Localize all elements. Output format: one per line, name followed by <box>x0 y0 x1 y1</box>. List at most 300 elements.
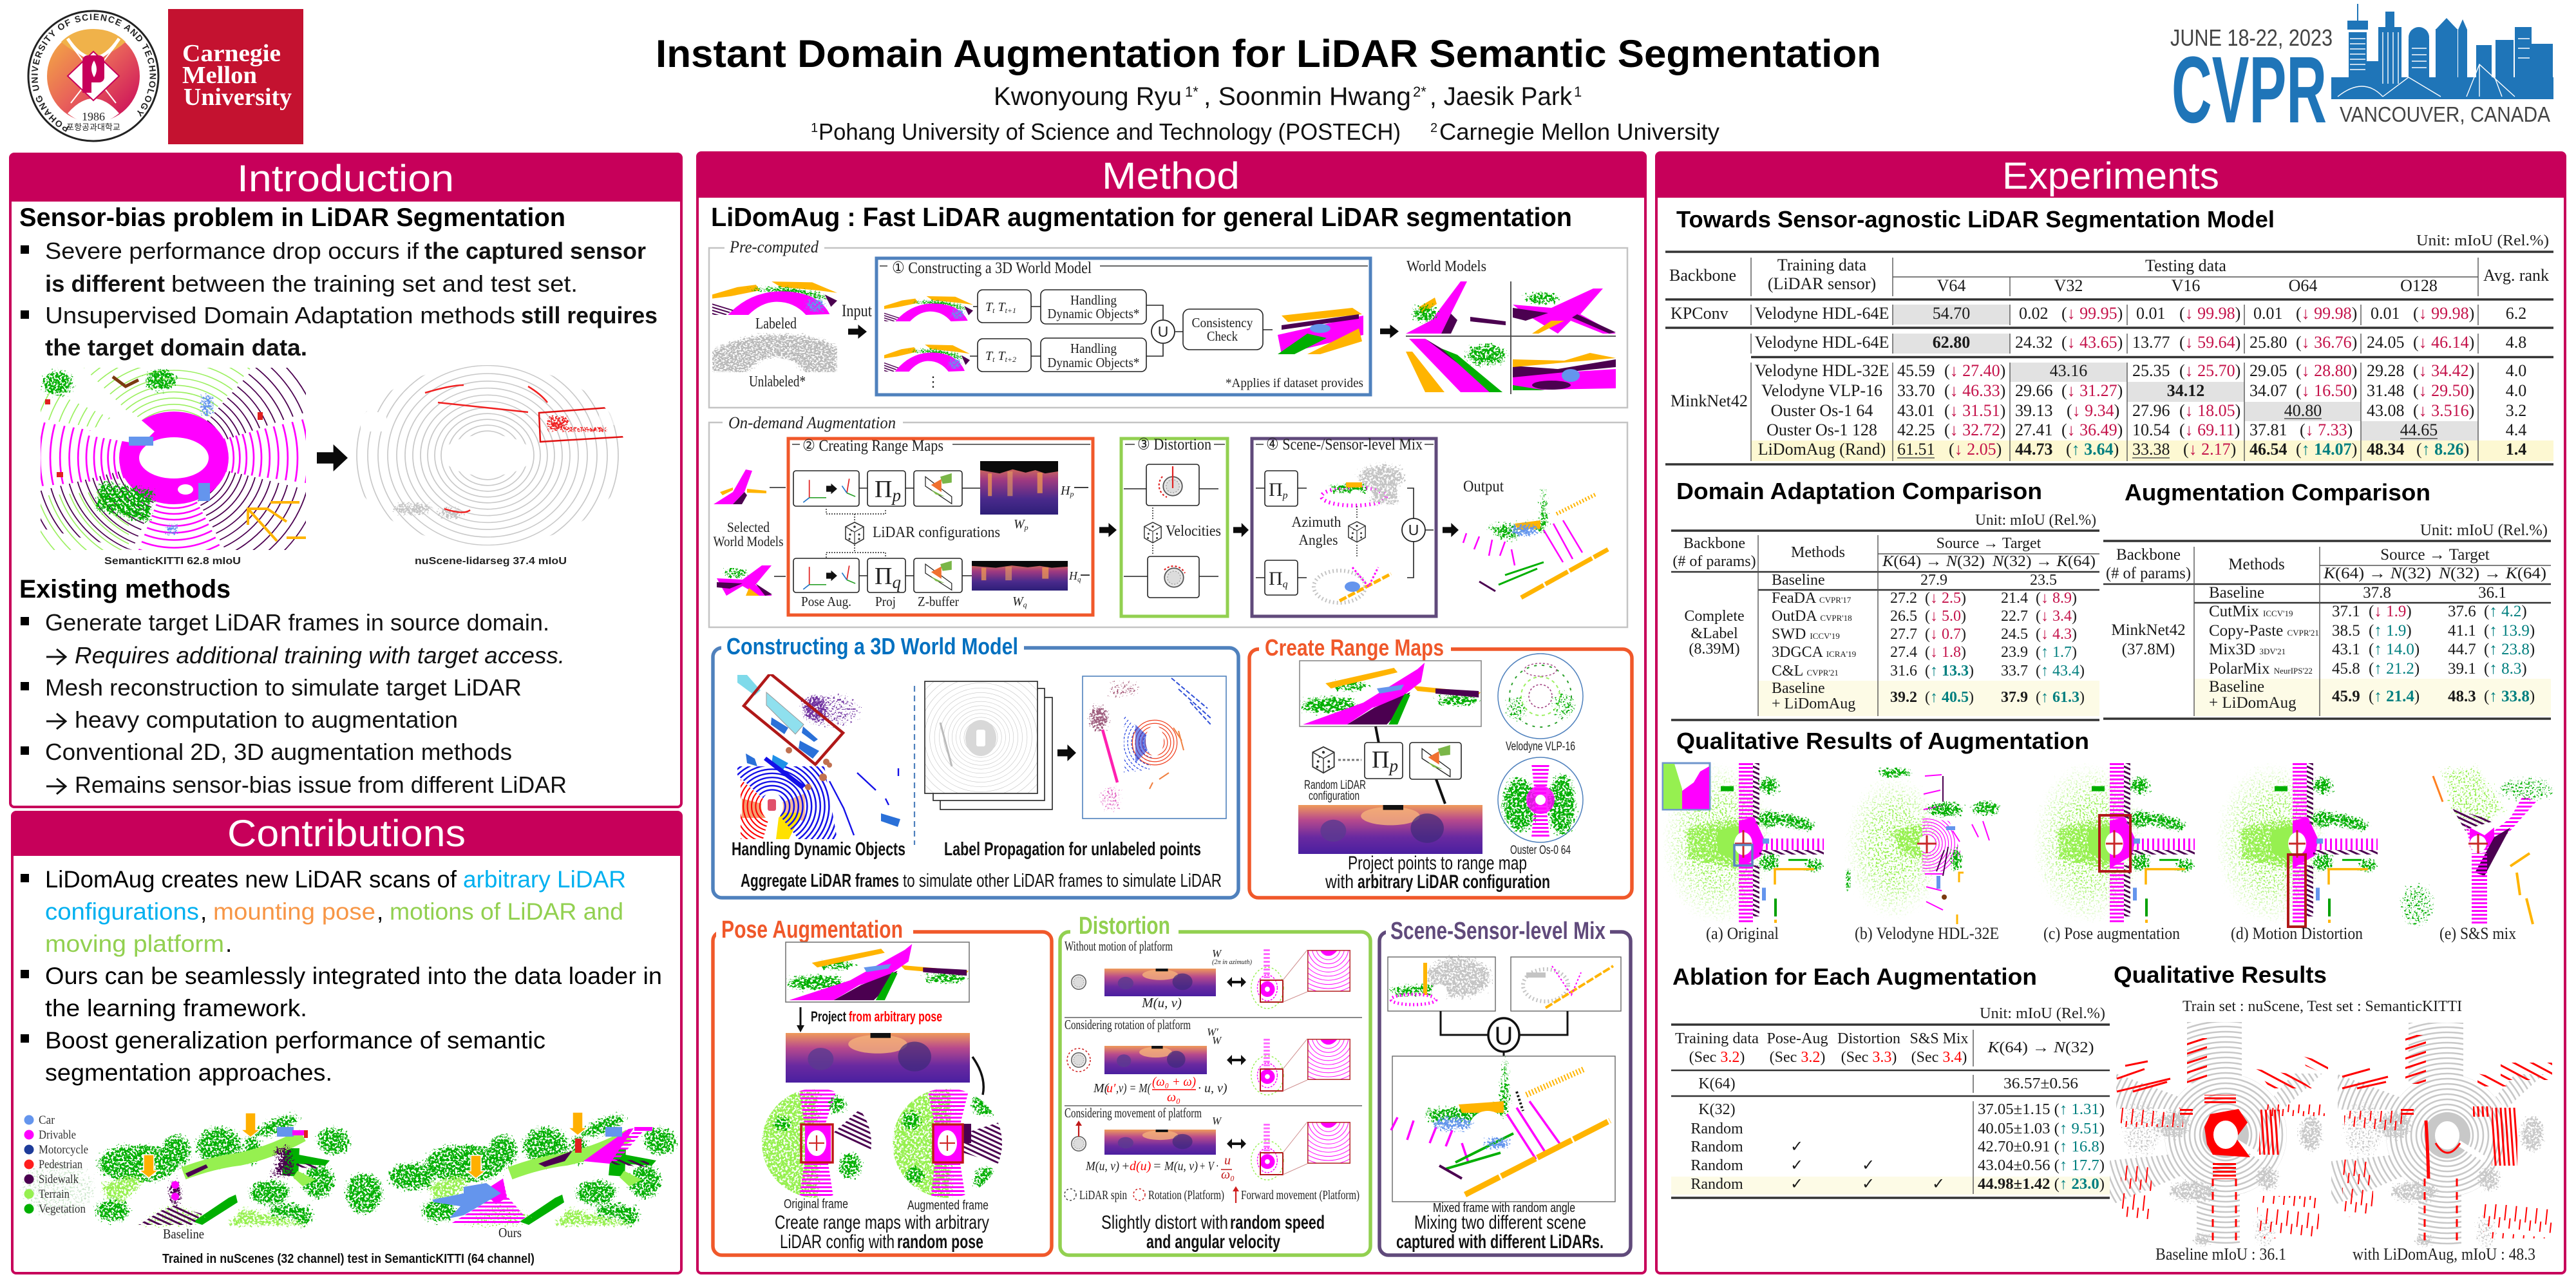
table: augmentation comparison: Backbone <box>2116 546 2181 564</box>
table: sensor-agnostic results: 34.12 <box>2167 381 2204 400</box>
table: domain adaptation comparison: 37.9 <box>2001 689 2028 706</box>
image: S&S mix: (e) S&S mix <box>2439 924 2516 943</box>
arrow: project: from arbitrary pose <box>849 1009 942 1025</box>
table: sensor-agnostic results: 46.54 <box>2249 440 2287 459</box>
table: sensor-agnostic results: (↓ 99.98) <box>2413 304 2474 323</box>
table: domain adaptation comparison: C&L CVPR'21 <box>1772 663 1839 679</box>
table: augmentation comparison: 36.1 <box>2478 584 2506 601</box>
row: movement of platform: M(u, v) <box>1164 1159 1198 1173</box>
box: distortion: ③ Distortion <box>1137 436 1211 453</box>
table: sensor-agnostic results: 42.25 <box>1897 421 1935 439</box>
legend: semantic classes: Drivable <box>39 1128 76 1142</box>
table: sensor-agnostic results: Velodyne HDL-64E <box>1755 304 1889 323</box>
box: constructing a 3D world model: Check <box>1207 328 1238 344</box>
table: ablation: K(32) <box>1698 1101 1736 1118</box>
table: sensor-agnostic results: (↓ 28.80) <box>2296 361 2357 380</box>
table: sensor-agnostic results: 27.41 <box>2015 421 2053 439</box>
table: augmentation comparison: MinkNet42 <box>2111 621 2186 639</box>
caption: aggregate frames: Aggregate LiDAR frames <box>741 871 899 891</box>
table: sensor-agnostic results: (↓ 36.49) <box>2061 421 2123 439</box>
table: sensor-agnostic results: MinkNet42 <box>1671 392 1748 410</box>
logo: POSTECH: POHANG UNIVERSITY OF SCIENCE AND TECHNOLOGY <box>31 14 156 132</box>
box: creating range maps: W <box>1012 594 1023 609</box>
scan: Velodyne VLP-16 <box>1498 654 1583 753</box>
caption: random speed: Slightly distort with <box>1101 1212 1228 1233</box>
table: domain adaptation comparison: Baseline <box>1772 680 1825 697</box>
table: domain adaptation comparison: FeaDA CVPR'17 <box>1772 590 1852 607</box>
table: sensor-agnostic results: 24.05 <box>2367 333 2405 352</box>
table: ablation: Random <box>1690 1176 1743 1193</box>
affiliations: 1 <box>811 121 818 135</box>
image: Velodyne HDL-32E <box>1846 766 2004 943</box>
bullets: existing methods: heavy computation to augmentation <box>75 706 458 733</box>
table: domain adaptation comparison: (↓ 0.7) <box>1925 626 1966 643</box>
diagram: pre-computed: Unlabeled* <box>749 374 806 390</box>
diagram: pre-computed: Input <box>842 301 873 320</box>
table: sensor-agnostic results: (↓ 69.11) <box>2179 421 2240 439</box>
scan: augmented frame: Augmented frame <box>907 1198 989 1213</box>
box: scene-sensor-level mix: Angles <box>1298 532 1338 548</box>
legend: motion types <box>1065 1186 1359 1203</box>
box: creating range maps: Π <box>875 476 892 503</box>
union connector: U <box>1495 1022 1513 1050</box>
table: augmentation comparison: K(64) → N(32) <box>2323 565 2431 582</box>
table: augmentation comparison: (↑ 23.8) <box>2484 641 2535 658</box>
bullets: contributions: configurations <box>45 898 199 925</box>
legend: semantic classes: Motorcycle <box>39 1143 88 1157</box>
subheading: augmentation comparison: Augmentation Comparison <box>2125 479 2430 506</box>
table: augmentation comparison: 37.6 <box>2448 603 2476 620</box>
image: LiDomAug error map <box>2318 1007 2576 1264</box>
affiliations: 2 <box>1430 121 1437 135</box>
table: augmentation comparison: Mix3D 3DV'21 <box>2209 641 2286 658</box>
table: ablation: (Sec 3.2) <box>1689 1049 1745 1066</box>
row: movement of platform: u <box>1224 1153 1231 1168</box>
box: creating range maps: Z-buffer <box>918 594 959 609</box>
table: sensor-agnostic results: 13.77 <box>2132 333 2170 352</box>
table: sensor-agnostic results: V32 <box>2054 276 2083 295</box>
heading: Experiments: Experiments <box>2002 155 2219 197</box>
panel: Experiments <box>1655 151 2576 1273</box>
logo: Carnegie Mellon University <box>168 9 303 144</box>
bullets: sensor bias: Unsupervised Domain Adaptation methods <box>45 302 515 328</box>
table: domain adaptation comparison: (↑ 43.4) <box>2036 663 2085 679</box>
bullets: sensor bias: is different <box>45 270 165 297</box>
box: constructing a 3D world model: t <box>992 355 995 364</box>
caption: random speed: random speed <box>1230 1212 1325 1233</box>
box: constructing a 3D world model: Handling <box>1070 292 1117 308</box>
row: movement of platform <box>1065 1016 1430 1222</box>
icon: lidar configuration: Random LiDAR <box>1304 779 1366 792</box>
table: sensor-agnostic results: (↓ 7.33) <box>2300 421 2353 439</box>
box: constructing a 3D world model: ⋮ <box>926 374 940 390</box>
table: ablation: K(64) → N(32) <box>1987 1039 2094 1056</box>
bullets: contributions: motions of LiDAR and <box>390 898 623 925</box>
table: augmentation comparison: CutMix ICCV'19 <box>2209 603 2293 620</box>
affiliations: Carnegie Mellon University <box>1439 118 1719 145</box>
panel: Introduction <box>0 153 700 807</box>
stacked label frames <box>913 681 1053 845</box>
box: creating range maps: Π <box>875 563 892 590</box>
subheading: ablation: Ablation for Each Augmentation <box>1672 963 2037 990</box>
table: domain adaptation comparison: SWD ICCV'19 <box>1772 626 1840 643</box>
table: ablation: 43.04±0.56 (↑ 17.7) <box>1978 1157 2105 1174</box>
panel: scene-sensor-level mix: Scene-Sensor-level Mix <box>1390 918 1605 945</box>
image: pose augmentation: (c) Pose augmentation <box>2043 924 2180 943</box>
panel: distortion: Distortion <box>1079 913 1170 940</box>
caption: random speed <box>1101 1212 1325 1253</box>
table: domain adaptation comparison: Unit: mIoU (Rel.%) <box>1975 512 2096 529</box>
box: constructing a 3D world model: T <box>994 300 1006 314</box>
row: without motion: W <box>1212 947 1222 960</box>
table: sensor-agnostic results: V16 <box>2172 276 2200 295</box>
box: constructing a 3D world model: Dynamic Objects* <box>1047 306 1140 321</box>
table: augmentation comparison: 39.1 <box>2448 660 2476 677</box>
panel: scene-sensor-level mix <box>1379 918 1631 1255</box>
image: pose augmentation <box>2034 763 2195 943</box>
table: ablation: ✓ <box>1790 1139 1803 1155</box>
table: sensor-agnostic results: (↓ 43.65) <box>2061 333 2123 352</box>
authors: 2* <box>1413 84 1426 100</box>
box: creating range maps: Pose Aug. <box>801 594 851 609</box>
table: sensor-agnostic results: 48.34 <box>2367 440 2405 459</box>
table: augmentation comparison: (↑ 21.2) <box>2369 660 2420 677</box>
panel: constructing a 3D world model: Constructing a 3D World Model <box>726 633 1018 659</box>
logo: CVPR 2023 Vancouver <box>2170 4 2553 143</box>
output: Output <box>1463 478 1504 495</box>
image: original: (a) Original <box>1706 924 1779 943</box>
table: sensor-agnostic results: 27.96 <box>2132 401 2170 420</box>
table: sensor-agnostic results: (↓ 18.05) <box>2179 401 2240 420</box>
box: scene-sensor-level mix <box>1252 436 1436 616</box>
box: creating range maps: LiDAR configurations <box>873 524 1000 541</box>
table: domain adaptation comparison: Baseline <box>1772 572 1825 589</box>
table: sensor-agnostic results: Avg. rank <box>2483 266 2549 285</box>
table: sensor-agnostic results: 31.48 <box>2367 381 2405 400</box>
table: ablation: Random <box>1690 1139 1743 1155</box>
scan: augmented frame <box>893 1088 1005 1213</box>
title: Instant Domain Augmentation for LiDAR Semantic Segmentation <box>656 32 1881 75</box>
box: constructing a 3D world model: t+1 <box>1005 306 1016 315</box>
bullets: sensor bias <box>21 238 658 361</box>
bullets: existing methods <box>21 609 567 798</box>
heading: Method: Method <box>1102 155 1240 197</box>
heading: Introduction: Introduction <box>237 158 454 200</box>
table: sensor-agnostic results: (↓ 36.76) <box>2296 333 2357 352</box>
bullets: contributions: . <box>225 931 232 957</box>
table: sensor-agnostic results <box>1665 252 2553 464</box>
row: without motion: (2π in azimuth) <box>1212 958 1252 966</box>
table: sensor-agnostic results: (↑ 14.07) <box>2296 440 2357 459</box>
table: sensor-agnostic results: KPConv <box>1671 304 1728 323</box>
box: constructing a 3D world model: T <box>994 349 1006 363</box>
table: sensor-agnostic results: (↓ 31.51) <box>1944 401 2005 420</box>
table: domain adaptation comparison: (# of params) <box>1672 553 1756 570</box>
caption: random pose: random pose <box>897 1231 983 1253</box>
captions: baseline and ours <box>163 1225 522 1242</box>
box: creating range maps: q <box>1023 600 1027 609</box>
table: domain adaptation comparison: N(32) → K(64) <box>1992 553 2096 570</box>
table: ablation: (Sec 3.3) <box>1841 1049 1897 1066</box>
box: creating range maps: p <box>1024 523 1028 532</box>
box: creating range maps: H <box>1061 484 1070 498</box>
table: ablation: (Sec 3.2) <box>1770 1049 1825 1066</box>
table: sensor-agnostic results: 44.73 <box>2015 440 2053 459</box>
row: without motion: Without motion of platform <box>1065 938 1173 954</box>
box: scene-sensor-level mix: Π <box>1269 568 1283 589</box>
caption: training note: Trained in nuScenes (32 channel) test in SemanticKITTI (64 channel) <box>162 1252 535 1266</box>
note: train and test set: Train set : nuScene, Test set : SemanticKITTI <box>2183 998 2462 1015</box>
caption: random pose <box>775 1212 989 1253</box>
box: constructing a 3D world model: U <box>1158 323 1168 340</box>
table: sensor-agnostic results: (↓ 27.40) <box>1944 361 2005 380</box>
diagram: on-demand augmentation: World Models <box>714 533 783 549</box>
table: domain adaptation comparison: (↓ 5.0) <box>1925 608 1966 625</box>
table: domain adaptation comparison: Complete <box>1684 608 1745 625</box>
image: Velodyne HDL-32E: (b) Velodyne HDL-32E <box>1855 924 1999 943</box>
box: scene-sensor-level mix: q <box>1283 579 1288 590</box>
table: sensor-agnostic results: 3.2 <box>2506 401 2526 420</box>
box: scene-sensor-level mix: U <box>1408 522 1419 538</box>
table: augmentation comparison: N(32) → K(64) <box>2438 565 2546 582</box>
scan: Velodyne VLP-16: Velodyne VLP-16 <box>1506 740 1575 753</box>
table: augmentation comparison: (↑ 14.0) <box>2369 641 2420 658</box>
table: augmentation comparison: 44.7 <box>2448 641 2476 658</box>
panel: Method <box>663 151 1645 1273</box>
authors: , Soonmin Hwang <box>1204 82 1411 111</box>
table: ablation: K(64) <box>1698 1075 1736 1092</box>
table: sensor-agnostic results: Velodyne HDL-64E <box>1755 333 1889 352</box>
table: ablation <box>1671 1005 2110 1198</box>
box: constructing a 3D world model: T <box>985 300 992 314</box>
table: domain adaptation comparison: K(64) → N(32) <box>1882 553 1985 570</box>
box: creating range maps: q <box>892 573 901 592</box>
table: ablation: Training data <box>1675 1030 1759 1047</box>
table: sensor-agnostic results: (↓ 99.95) <box>2061 304 2123 323</box>
table: domain adaptation comparison: (↓ 3.4) <box>2036 608 2077 625</box>
legend: motion types: Forward movement (Platform) <box>1241 1188 1359 1202</box>
table: sensor-agnostic results: V64 <box>1937 276 1965 295</box>
table: domain adaptation comparison: (↓ 8.9) <box>2036 590 2077 607</box>
caption: mixing scenes: captured with different LiDARs. <box>1396 1231 1604 1253</box>
table: augmentation comparison: (# of params) <box>2106 565 2191 582</box>
box: creating range maps <box>788 437 1093 615</box>
caption: mixing scenes <box>1396 1212 1604 1253</box>
table: augmentation comparison: 37.8 <box>2363 584 2391 601</box>
image: nuScenes scan <box>356 365 623 545</box>
box: constructing a 3D world model: *Applies if dataset provides <box>1226 376 1363 390</box>
legend: semantic classes: Vegetation <box>39 1202 86 1216</box>
union connector <box>1441 1011 1567 1056</box>
subheading: existing methods: Existing methods <box>19 575 231 603</box>
table: sensor-agnostic results: 0.01 <box>2371 304 2400 323</box>
caption: project points: arbitrary LiDAR configuration <box>1358 871 1550 893</box>
logo: CVPR 2023 Vancouver: VANCOUVER, CANADA <box>2340 102 2550 126</box>
image: motion distortion: (d) Motion Distortion <box>2231 924 2363 943</box>
panel: pose augmentation <box>713 916 1052 1255</box>
row: rotation of platform: Considering rotation of platform <box>1065 1017 1191 1032</box>
table: augmentation comparison: (↑ 21.4) <box>2369 688 2420 705</box>
bullets: existing methods: Requires additional training with target access. <box>75 642 565 668</box>
authors <box>994 82 1582 111</box>
table: sensor-agnostic results: 4.0 <box>2506 361 2526 380</box>
table: ablation: S&S Mix <box>1910 1030 1968 1047</box>
diagram: pre-computed: Pre-computed <box>729 238 819 256</box>
subheading: qualitative results of augmentation: Qualitative Results of Augmentation <box>1676 728 2089 754</box>
box: creating range maps: p <box>1069 489 1074 498</box>
caption: project points: with <box>1325 871 1354 893</box>
table: sensor-agnostic results: (↓ 59.64) <box>2179 333 2240 352</box>
table: sensor-agnostic results: 25.80 <box>2249 333 2287 352</box>
box: creating range maps: Proj <box>875 594 896 609</box>
caption: random pose: LiDAR config with <box>780 1231 895 1253</box>
table: sensor-agnostic results: 0.02 <box>2019 304 2048 323</box>
subheading: sensor-bias problem: Sensor-bias problem in LiDAR Segmentation <box>19 204 565 232</box>
box: creating range maps: W <box>1014 517 1025 531</box>
caption: random pose: Create range maps with arbitrary <box>775 1212 989 1233</box>
table: sensor-agnostic results: Training data <box>1777 256 1867 274</box>
row: rotation of platform: W′ <box>1207 1026 1218 1038</box>
table: sensor-agnostic results: (↓ 3.516) <box>2413 401 2474 420</box>
logo: CVPR 2023 Vancouver: CVPR <box>2172 37 2327 143</box>
legend: motion types: Rotation (Platform) <box>1148 1188 1224 1202</box>
table: domain adaptation comparison: 39.2 <box>1890 689 1917 706</box>
table: domain adaptation comparison: 24.5 <box>2001 626 2028 643</box>
row: rotation of platform: ,v) = M( <box>1116 1081 1151 1095</box>
legend: semantic classes <box>23 1113 93 1216</box>
table: augmentation comparison <box>2103 522 2551 719</box>
legend: motion types: LiDAR spin <box>1079 1188 1127 1202</box>
image: original <box>1663 763 1824 943</box>
panel: constructing a 3D world model <box>711 638 1240 900</box>
bullets: contributions: moving platform <box>45 931 224 957</box>
logo: Carnegie Mellon University: University <box>184 84 292 111</box>
table: sensor-agnostic results: (↓ 31.27) <box>2061 381 2123 400</box>
table: sensor-agnostic results: 4.4 <box>2506 421 2526 439</box>
table: sensor-agnostic results: 24.32 <box>2015 333 2053 352</box>
table: augmentation comparison: 41.1 <box>2448 622 2476 639</box>
table: augmentation comparison: Source → Target <box>2380 546 2490 564</box>
bullets: existing methods: Mesh reconstruction to simulate target LiDAR <box>45 674 522 701</box>
table: sensor-agnostic results: 62.80 <box>1933 333 1970 352</box>
authors: 1* <box>1185 84 1198 100</box>
table: domain adaptation comparison: (↓ 4.3) <box>2036 626 2077 643</box>
bullets: contributions: Boost generalization performance of semantic <box>45 1027 545 1054</box>
table: ablation: ✓ <box>1790 1157 1803 1174</box>
box: scene-sensor-level mix: ④ Scene-/Sensor-level Mix <box>1266 436 1423 453</box>
diagram: pre-computed: Labeled <box>755 316 797 332</box>
box: constructing a 3D world model: Dynamic Objects* <box>1047 355 1140 370</box>
row: movement of platform: d(u) <box>1130 1159 1151 1173</box>
row: movement of platform: + V · <box>1199 1159 1218 1173</box>
scan: original frame: Original frame <box>784 1197 848 1211</box>
table: sensor-agnostic results: 43.01 <box>1897 401 1935 420</box>
table: ablation: 42.70±0.91 (↑ 16.8) <box>1978 1139 2105 1155</box>
box: constructing a 3D world model: Handling <box>1070 341 1117 356</box>
box: constructing a 3D world model: Consistency <box>1191 315 1253 330</box>
bullets: contributions: segmentation approaches. <box>45 1059 332 1086</box>
table: sensor-agnostic results: (↓ 2.17) <box>2183 440 2236 459</box>
table: augmentation comparison: (↓ 1.9) <box>2369 603 2412 620</box>
row: rotation of platform: W <box>1212 1034 1222 1046</box>
table: domain adaptation comparison: 27.4 <box>1890 644 1917 661</box>
row: rotation of platform: · u, v) <box>1198 1081 1227 1095</box>
captions: baseline and ours: Ours <box>498 1225 522 1240</box>
subheading: domain adaptation: Domain Adaptation Comparison <box>1676 478 2042 504</box>
diagram: on-demand augmentation: On-demand Augmentation <box>728 413 896 432</box>
table: domain adaptation comparison: 27.2 <box>1890 590 1917 607</box>
table: sensor-agnostic results: 37.81 <box>2249 421 2287 439</box>
legend: semantic classes: Sidewalk <box>39 1173 79 1186</box>
table: augmentation comparison: 45.8 <box>2332 660 2360 677</box>
image: baseline error map: Baseline mIoU : 36.1 <box>2155 1245 2286 1264</box>
table: sensor-agnostic results: (↓ 99.98) <box>2179 304 2240 323</box>
box: constructing a 3D world model <box>876 258 1370 395</box>
table: sensor-agnostic results: (↓ 25.70) <box>2179 361 2240 380</box>
diagram: on-demand augmentation: Selected <box>727 519 770 535</box>
box: scene-sensor-level mix: Azimuth <box>1292 514 1341 530</box>
arrow: project <box>797 1007 942 1032</box>
table: augmentation comparison: (↑ 13.9) <box>2484 622 2535 639</box>
output <box>1463 478 1608 598</box>
affiliations: Pohang University of Science and Technology (POSTECH) <box>819 118 1401 145</box>
authors: Kwonyoung Ryu <box>994 82 1182 111</box>
table: domain adaptation comparison <box>1671 512 2099 720</box>
captions: baseline and ours: Baseline <box>163 1226 204 1242</box>
row: movement of platform: M(u, v) <box>1085 1159 1119 1173</box>
bullets: contributions <box>21 866 662 1086</box>
logo: Carnegie Mellon University: Carnegie <box>182 40 281 67</box>
caption: mixed frame: Mixed frame with random angle <box>1433 1201 1575 1215</box>
table: ablation: (Sec 3.4) <box>1911 1049 1967 1066</box>
image: SemanticKITTI scan <box>41 368 306 550</box>
bullets: contributions: the learning framework. <box>45 995 307 1021</box>
table: sensor-agnostic results: 6.2 <box>2506 304 2526 323</box>
table: sensor-agnostic results: O64 <box>2289 276 2317 295</box>
table: sensor-agnostic results: 43.08 <box>2367 401 2405 420</box>
scan: Ouster Os-0 64 <box>1498 757 1583 857</box>
icon: lidar configuration: configuration <box>1309 790 1359 803</box>
table: ablation: ✓ <box>1862 1157 1875 1174</box>
table: sensor-agnostic results: Velodyne HDL-32E <box>1755 361 1889 380</box>
row: movement of platform: = <box>1153 1159 1162 1173</box>
table: domain adaptation comparison: Source → Target <box>1937 535 2041 552</box>
bullets: contributions: , <box>377 898 383 925</box>
box: distortion <box>1121 436 1227 616</box>
table: sensor-agnostic results: 29.66 <box>2015 381 2053 400</box>
table: ablation: ✓ <box>1932 1176 1945 1193</box>
table: ablation: 44.98±1.42 (↑ 23.0) <box>1978 1176 2105 1193</box>
world models: World Models <box>1406 258 1486 275</box>
scan: original frame <box>760 1088 876 1211</box>
table: augmentation comparison: 38.5 <box>2332 622 2360 639</box>
table: augmentation comparison: (37.8M) <box>2122 641 2175 658</box>
table: sensor-agnostic results: 29.28 <box>2367 361 2405 380</box>
caption: label propagation: Label Propagation for unlabeled points <box>944 839 1201 860</box>
table: sensor-agnostic results: (↓ 29.50) <box>2413 381 2474 400</box>
table: sensor-agnostic results: 0.01 <box>2136 304 2165 323</box>
table: domain adaptation comparison: 26.5 <box>1890 608 1917 625</box>
bullets: contributions: LiDomAug creates new LiDAR scans of <box>45 866 457 893</box>
table: domain adaptation comparison: OutDA CVPR'18 <box>1772 608 1852 625</box>
table: ablation: Random <box>1690 1157 1743 1174</box>
legend: semantic classes: Pedestrian <box>39 1158 82 1171</box>
caption: random speed: and angular velocity <box>1146 1231 1280 1253</box>
table: augmentation comparison: Copy-Paste CVPR'21 <box>2209 622 2319 639</box>
table: domain adaptation comparison: + LiDomAug <box>1772 696 1855 712</box>
table: augmentation comparison: (↑ 1.9) <box>2369 622 2412 639</box>
table: augmentation comparison: Baseline <box>2209 678 2264 696</box>
